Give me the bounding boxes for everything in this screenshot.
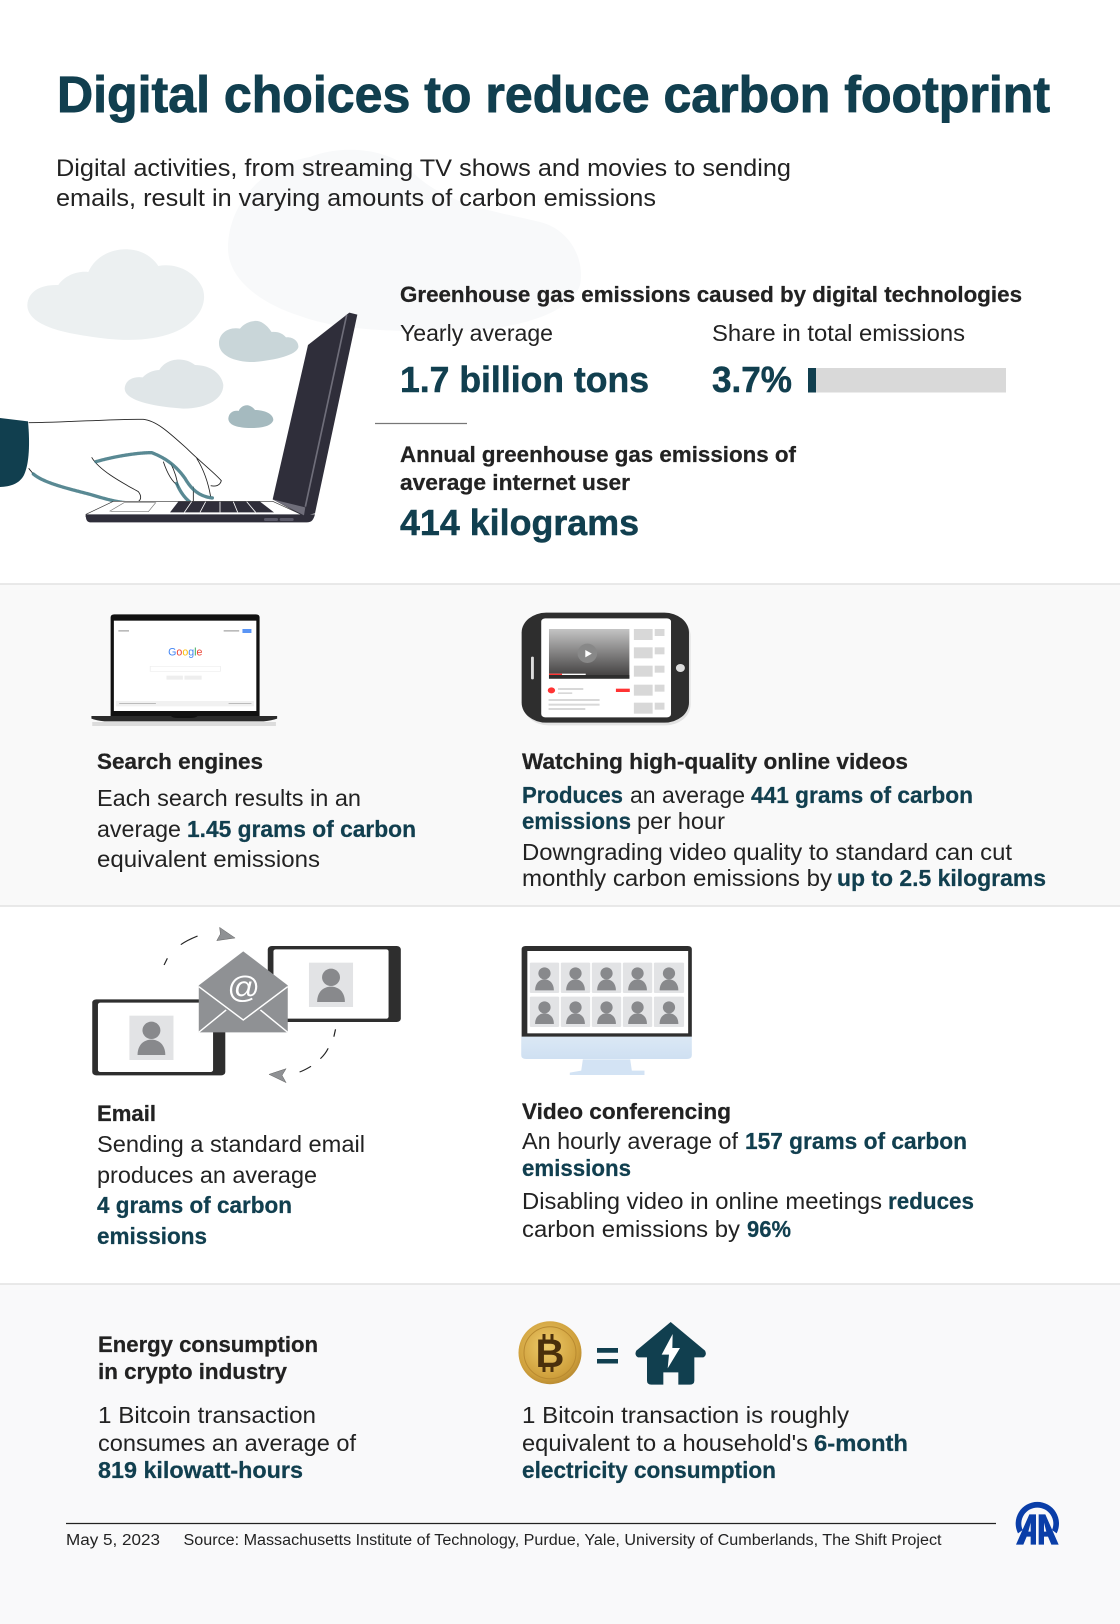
icon: email exchange (92, 927, 401, 1083)
text block: search engines: Search engines (97, 749, 263, 774)
text block: video conferencing: An hourly average of (522, 1128, 738, 1154)
stat: share in total emissions: 3.7% (712, 359, 792, 400)
text block: bitcoin household comparison: equivalent to a household's (522, 1430, 808, 1456)
icon: house with lightning (635, 1322, 706, 1385)
text block: email (97, 1101, 365, 1249)
text block: email: produces an average (97, 1162, 317, 1188)
text block: email: emissions (97, 1223, 207, 1249)
bar chart: share (808, 368, 1006, 392)
icon: sleeve (0, 418, 29, 487)
text block: video conferencing: Video conferencing (522, 1099, 731, 1124)
text block: bitcoin household comparison: 1 Bitcoin transaction is roughly (522, 1402, 849, 1428)
icon: keyboard (170, 502, 274, 512)
panel: search and video background (0, 584, 1120, 906)
text block: video conferencing: emissions (522, 1155, 631, 1181)
stat: average internet user: average internet user (400, 470, 630, 495)
icon: laptop with search page (91, 614, 277, 726)
text block: online videos: an average (630, 782, 745, 808)
text block: online videos: Produces (522, 782, 623, 808)
text block: online videos: Watching high-quality online videos (522, 749, 908, 774)
text block: crypto energy (98, 1332, 356, 1483)
text block: crypto energy: Energy consumption (98, 1332, 318, 1357)
stat: average internet user: 414 kilograms (400, 502, 639, 543)
text block: video conferencing: reduces (888, 1188, 974, 1214)
text block: email: 4 grams of carbon (97, 1192, 292, 1218)
text block: online videos: up to 2.5 kilograms (837, 865, 1046, 891)
text block: bitcoin household comparison: electricity consumption (522, 1457, 776, 1483)
text block: search engines (97, 749, 416, 872)
heading: digital technologies emissions: Greenhouse gas emissions caused by digital technologies (400, 282, 1022, 307)
text block: search engines: Each search results in an (97, 785, 361, 811)
stat: share in total emissions: Share in total emissions (712, 320, 965, 346)
text block: online videos: monthly carbon emissions by (522, 865, 832, 891)
text block: search engines: average (97, 816, 181, 842)
icon: equals sign (597, 1348, 618, 1364)
footer source: Source: Massachusetts Institute of Technology, Purdue, Yale, University of Cumberlands, The Shift Project (184, 1532, 942, 1549)
icon: envelope (199, 951, 288, 1032)
text block: crypto energy: in crypto industry (98, 1359, 287, 1384)
subtitle (56, 155, 791, 212)
stat: yearly average: 1.7 billion tons (400, 359, 649, 400)
icon: left tablet (92, 999, 225, 1075)
icon: bitcoin coin: B (536, 1332, 564, 1376)
text block: online videos: emissions (522, 808, 631, 834)
icon: laptop touchpad (110, 503, 156, 512)
text block: crypto energy: 819 kilowatt-hours (98, 1457, 303, 1483)
icon: right tablet (268, 946, 401, 1022)
panel: crypto background (0, 1284, 1120, 1624)
icon: laptop screen (273, 313, 357, 516)
text block: online videos (522, 749, 1046, 891)
icon: phone with video player (522, 613, 691, 725)
icon: laptop bottom edge (86, 514, 315, 522)
subtitle: Digital activities, from streaming TV shows and movies to sending (56, 155, 791, 182)
icon: bitcoin coin (518, 1321, 582, 1384)
text block: online videos: per hour (637, 808, 725, 834)
title: Digital choices to reduce carbon footprint (57, 66, 1050, 123)
stat: share in total emissions (712, 320, 1006, 400)
text block: crypto energy: 1 Bitcoin transaction (98, 1402, 316, 1428)
google wordmark: Google (168, 645, 203, 658)
text block: online videos: Downgrading video quality to standard can cut (522, 839, 1012, 865)
text block: video conferencing (522, 1099, 974, 1242)
icon: AA logo (1016, 1502, 1059, 1545)
arrow: lower dashed (300, 1029, 336, 1072)
footer date: May 5, 2023 (66, 1532, 160, 1549)
text block: bitcoin household comparison (522, 1402, 908, 1483)
stat: yearly average (400, 320, 649, 400)
participant tiles (530, 963, 684, 1027)
stat: average internet user (400, 442, 796, 543)
icon: small cloud (219, 321, 298, 362)
text block: crypto energy: consumes an average of (98, 1430, 356, 1456)
text block: search engines: equivalent emissions (97, 846, 320, 872)
text block: bitcoin household comparison: 6-month (814, 1430, 908, 1456)
arrow: upper dashed (164, 936, 198, 965)
icon: monitor with video call grid (521, 946, 692, 1075)
icon: laptop base (86, 501, 304, 517)
text block: online videos: 441 grams of carbon (751, 782, 973, 808)
text block: video conferencing: Disabling video in online meetings (522, 1188, 882, 1214)
text block: email: Sending a standard email (97, 1131, 365, 1157)
icon: hand outline (29, 419, 221, 504)
illustration: hand typing on laptop with clouds (0, 249, 357, 522)
subtitle: emails, result in varying amounts of carbon emissions (56, 185, 656, 212)
icon: medium cloud (125, 360, 223, 409)
stat: yearly average: Yearly average (400, 320, 553, 346)
icon: large cloud (27, 249, 204, 340)
text block: email: Email (97, 1101, 156, 1126)
icon: hand shading (33, 453, 213, 503)
icon: tiny cloud (228, 405, 273, 428)
at sign: @ (227, 970, 260, 1004)
stat: average internet user: Annual greenhouse gas emissions of (400, 442, 796, 467)
text block: video conferencing: 96% (747, 1216, 791, 1242)
text block: video conferencing: 157 grams of carbon (745, 1128, 967, 1154)
text block: video conferencing: carbon emissions by (522, 1216, 740, 1242)
background cloud (228, 150, 581, 331)
text block: search engines: 1.45 grams of carbon (187, 816, 416, 842)
